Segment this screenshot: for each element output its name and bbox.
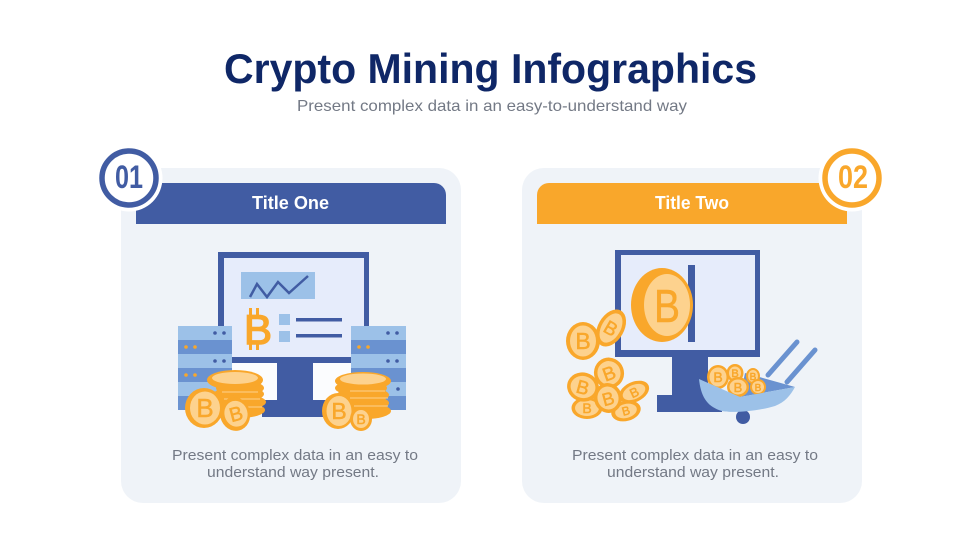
left coin stack: B bbox=[196, 393, 214, 423]
card background bbox=[522, 168, 862, 503]
scattered coins bbox=[564, 304, 653, 425]
scattered coins: B bbox=[574, 377, 591, 400]
number badge 01 bbox=[96, 144, 162, 212]
bitcoin symbol on screen: B bbox=[244, 306, 272, 353]
wheelbarrow with coins: B bbox=[755, 383, 762, 394]
scattered coins: B bbox=[575, 328, 591, 354]
heading: Title Two bbox=[655, 193, 729, 213]
wheelbarrow with coins: B bbox=[734, 380, 742, 395]
scattered coins: B bbox=[600, 388, 617, 410]
scattered coins: B bbox=[627, 384, 641, 401]
monitor bbox=[615, 250, 760, 412]
wheelbarrow with coins bbox=[699, 342, 815, 424]
left server rack bbox=[178, 326, 232, 410]
right coin stack: B bbox=[356, 411, 366, 427]
panel: title two bbox=[522, 144, 886, 503]
body text: Present complex data in an easy to bbox=[172, 447, 418, 464]
title: Crypto Mining Infographics bbox=[224, 45, 757, 92]
scattered coins: B bbox=[582, 400, 592, 416]
body text: Present complex data in an easy to bbox=[572, 447, 818, 464]
card background bbox=[121, 168, 461, 503]
right coin stack: B bbox=[331, 398, 347, 424]
wheelbarrow with coins: B bbox=[713, 369, 723, 385]
scattered coins: B bbox=[600, 362, 619, 386]
left coin stack: B bbox=[227, 402, 246, 427]
body text: understand way present. bbox=[207, 464, 379, 481]
list on screen bbox=[279, 314, 342, 342]
wheelbarrow with coins: B bbox=[750, 372, 757, 383]
panel: title one bbox=[96, 144, 461, 503]
large bitcoin coin bbox=[631, 268, 693, 342]
scattered coins: B bbox=[600, 317, 621, 342]
illustration: monitor with coins and wheelbarrow bbox=[564, 250, 815, 425]
illustration: monitor with servers and coins bbox=[178, 252, 406, 434]
heading: Title One bbox=[252, 193, 329, 213]
number badge 02 bbox=[818, 144, 886, 212]
chart on screen bbox=[241, 272, 315, 299]
right coin stack bbox=[322, 372, 391, 431]
right server rack bbox=[351, 326, 406, 410]
left coin stack bbox=[185, 370, 266, 434]
number badge 02: 02 bbox=[838, 159, 868, 195]
header bar bbox=[136, 183, 446, 224]
body text bbox=[572, 447, 818, 481]
body text: understand way present. bbox=[607, 464, 779, 481]
body text bbox=[172, 447, 418, 481]
large bitcoin coin: B bbox=[654, 280, 680, 332]
monitor bbox=[218, 252, 369, 417]
subtitle: Present complex data in an easy-to-understand way bbox=[297, 98, 687, 115]
header bar bbox=[537, 183, 847, 224]
scattered coins: B bbox=[620, 403, 632, 419]
wheelbarrow with coins: B bbox=[731, 368, 739, 380]
number badge 01: 01 bbox=[115, 159, 143, 195]
